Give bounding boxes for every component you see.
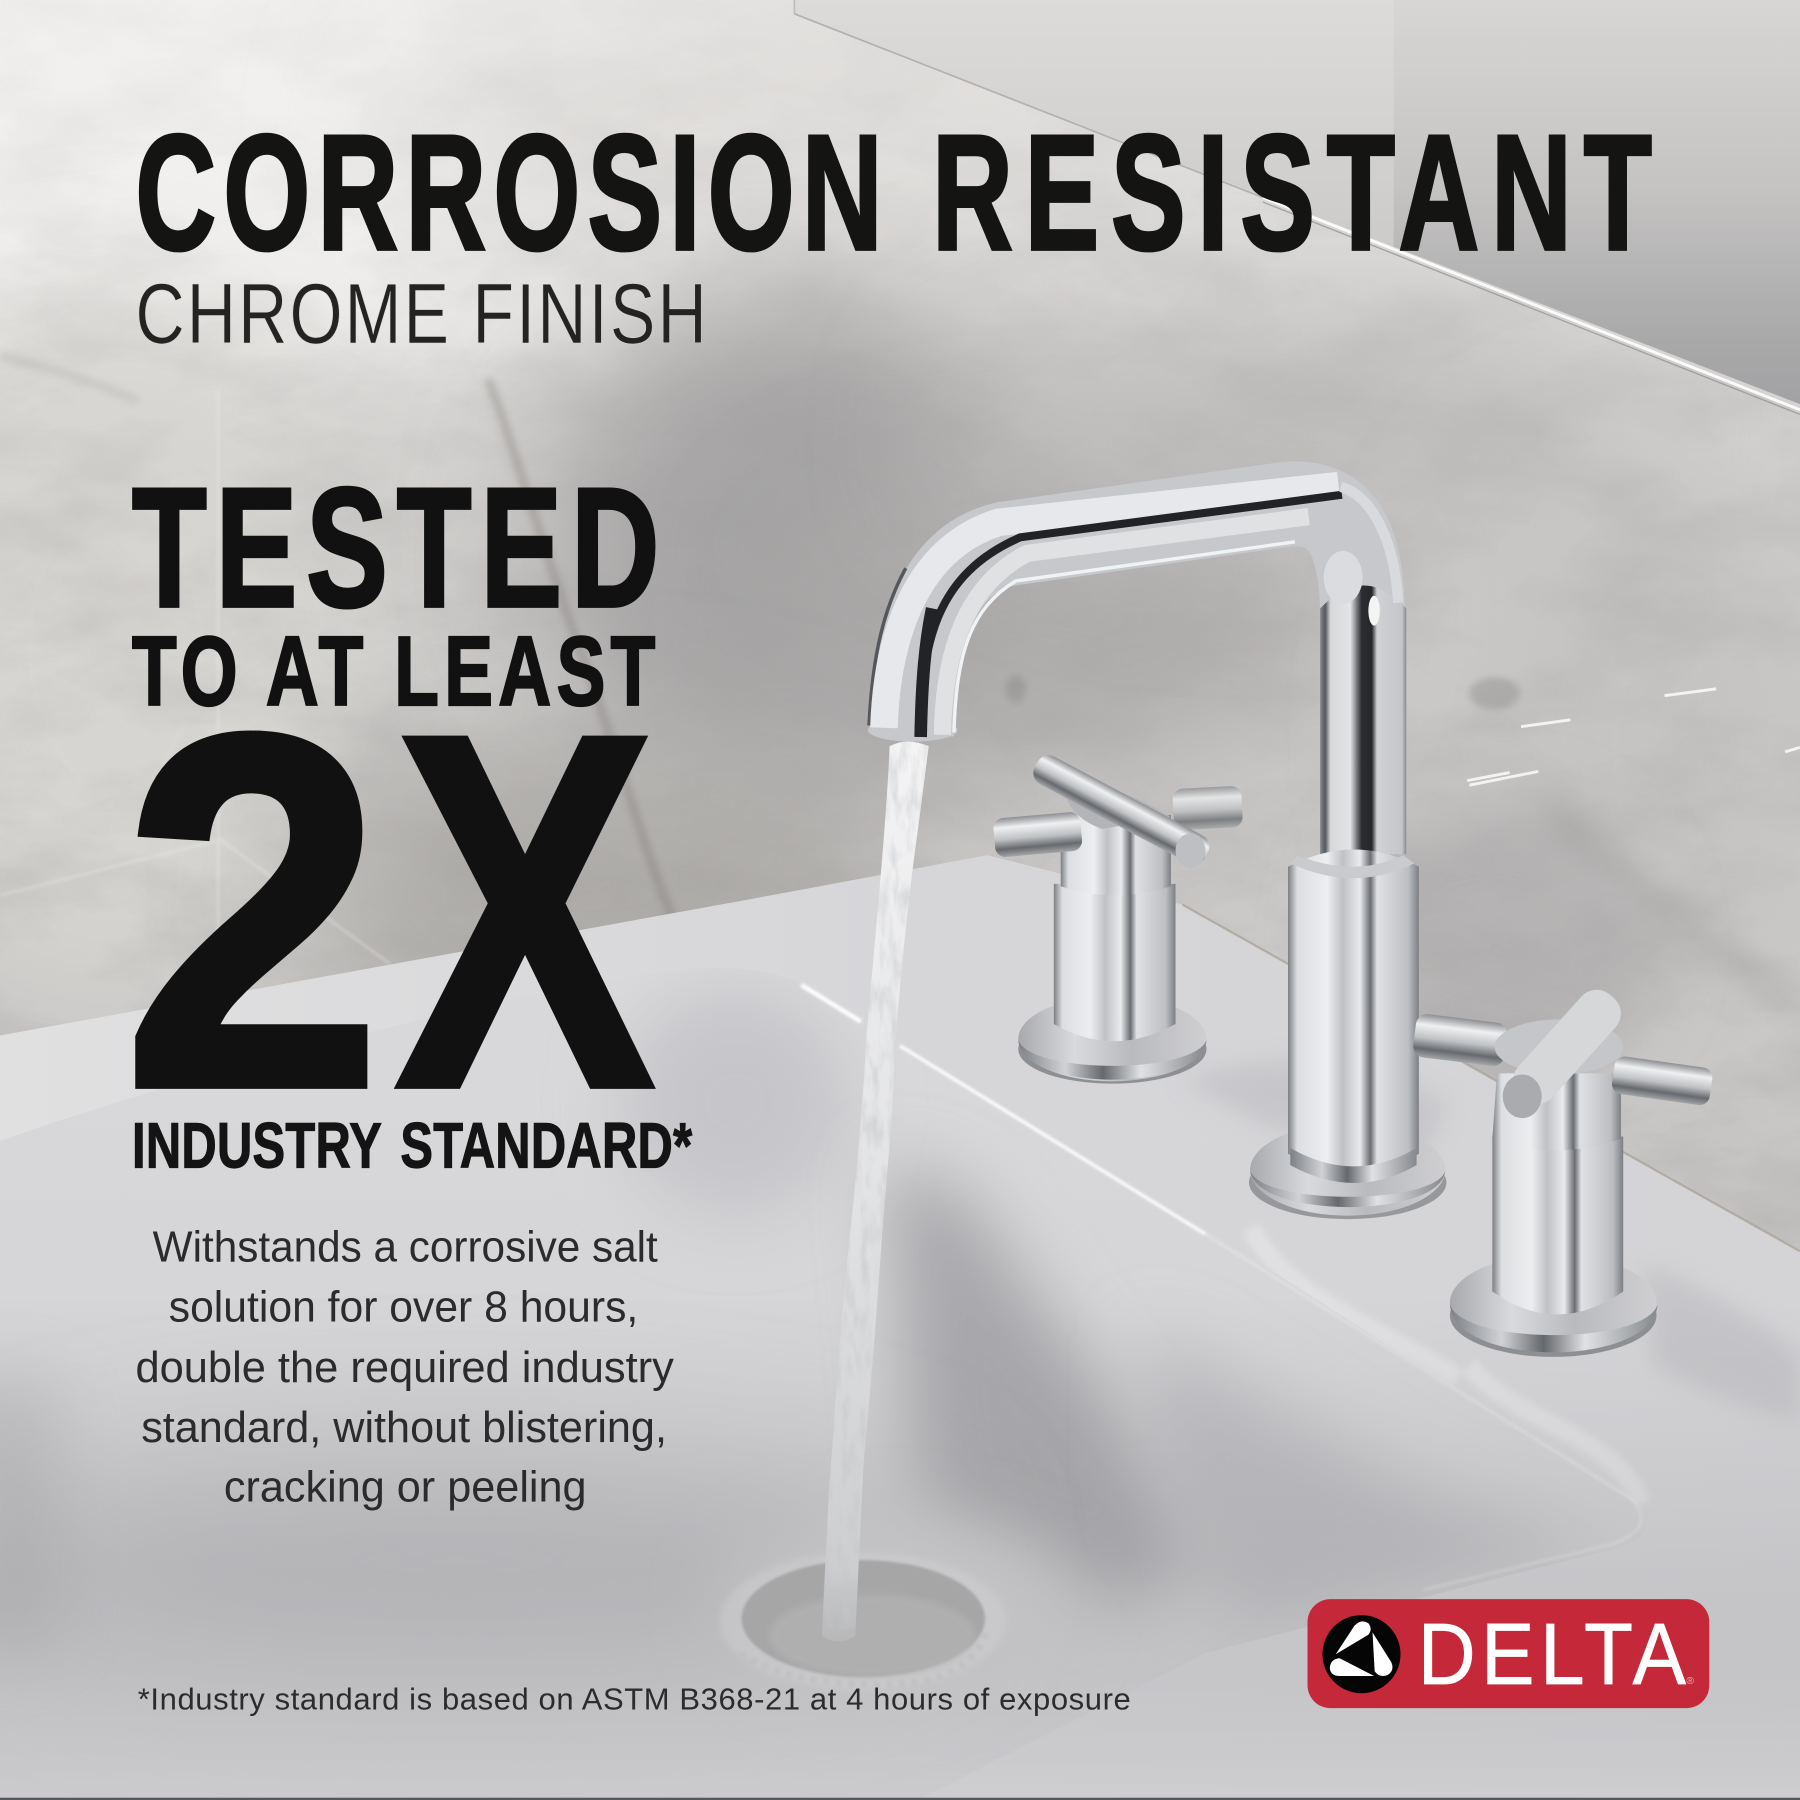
title: RESISTANT xyxy=(932,101,1652,284)
counter top xyxy=(0,855,1800,1800)
body text xyxy=(135,1224,674,1512)
lower vignette overlay xyxy=(0,1297,1800,1800)
callout: 2X xyxy=(123,630,656,1191)
footnote: *Industry standard is based on ASTM B368-21 at 4 hours of exposure xyxy=(138,1681,1131,1716)
title xyxy=(135,101,1652,284)
bottom edge line xyxy=(0,1798,1800,1800)
logo: Delta: ® xyxy=(1686,1676,1694,1687)
left edge shade xyxy=(0,1378,57,1653)
mirror reflection and edge xyxy=(794,0,1800,414)
drain xyxy=(720,1552,1007,1690)
logo: Delta: DELTA xyxy=(1418,1605,1686,1703)
callout: 2X: 2 xyxy=(123,630,382,1191)
subtitle: CHROME FINISH xyxy=(135,267,707,362)
icon: left cross handle xyxy=(993,751,1243,1084)
body text: cracking or peeling xyxy=(224,1464,587,1512)
sink basin xyxy=(0,968,1647,1800)
body text: standard, without blistering, xyxy=(141,1404,667,1452)
title: CORROSION xyxy=(135,101,883,284)
callout: industry standard: INDUSTRY STANDARD* xyxy=(132,1110,693,1182)
body text: Withstands a corrosive salt xyxy=(153,1224,658,1272)
callout: to at least: TO AT LEAST xyxy=(132,616,655,726)
logo: Delta xyxy=(1308,1599,1709,1708)
icon: faucet riser base xyxy=(1249,849,1446,1219)
background wall xyxy=(0,0,1800,1250)
water stream xyxy=(822,742,929,1642)
body text: double the required industry xyxy=(135,1344,674,1392)
icon: Delta circle mark xyxy=(1322,1615,1401,1693)
icon: faucet spout xyxy=(868,486,1406,854)
body text: solution for over 8 hours, xyxy=(169,1283,638,1331)
callout: tested: TESTED xyxy=(132,453,659,643)
icon: right cross handle xyxy=(1412,981,1714,1357)
callout: 2X: X xyxy=(396,631,656,1191)
